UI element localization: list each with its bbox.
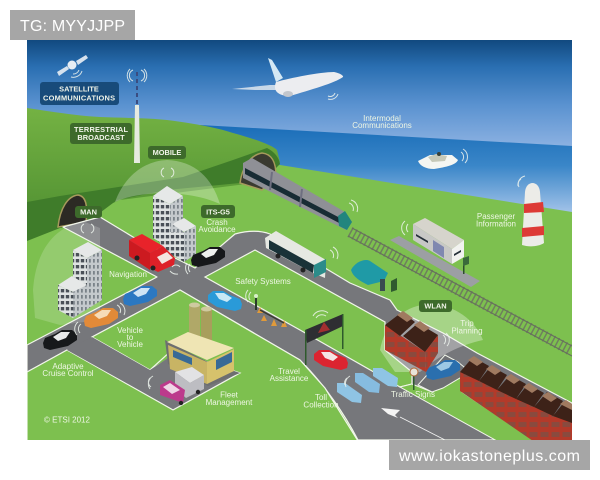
text: fleet management: Fleet [220,390,238,400]
railway [348,228,572,356]
hill [27,108,280,203]
green block: factory [27,290,358,441]
label: satellite communications [40,82,119,105]
road network [27,217,572,440]
label: its-g5: ITS-G5 [206,208,230,216]
toll gantry [305,311,344,365]
traffic sign [410,368,418,390]
label: wlan: WLAN [424,302,447,310]
label: its-g5 [201,205,235,218]
text: trip planning: Trip [460,319,474,328]
brick row houses [460,356,572,441]
text: intermodal communications: Communications [352,121,412,130]
watermark: top left [10,10,135,40]
icon: airplane [232,58,343,99]
label: terrestrial broadcast [70,123,132,144]
sky [27,40,572,148]
text: safety systems: Safety Systems [235,277,291,286]
bus shelter [351,260,397,292]
icon: terrestrial tower [127,69,147,163]
label: terrestrial broadcast: TERRESTRIAL [74,125,128,134]
red truck [129,234,175,272]
station [390,218,480,287]
bus [265,231,338,278]
orange car [84,308,118,328]
road dead end to fleet [67,337,169,407]
blue car navigation [123,286,157,306]
domes [33,160,483,372]
ground [27,165,572,440]
label: wlan [419,300,452,312]
illustration scene [27,40,572,441]
right tunnel [240,153,276,190]
wlan coverage dome [380,304,483,372]
text: trip planning: Planning [451,326,483,336]
black car crash avoidance [191,247,225,267]
text: vehicle to vehicle: to [127,333,134,342]
blue car safety [208,291,242,311]
green block: safety systems [205,250,412,387]
text: vehicle to vehicle: Vehicle [117,326,143,335]
mobile buildings [153,168,196,262]
text: toll collection: Collection [303,400,339,410]
train [243,158,358,230]
black car adaptive [43,330,77,350]
wlan brick building [385,311,449,372]
man coverage dome [33,222,100,325]
hill dark band [27,148,280,241]
text: etsi copyright: © ETSI 2012 [44,416,91,424]
blue car parked [426,360,460,380]
text: adaptive cruise control: Adaptive [52,362,84,371]
roads [27,217,572,441]
mobile coverage dome [115,160,220,204]
text: passenger information: Information [476,220,516,228]
road arrow [381,408,445,440]
icon: lighthouse [518,176,544,246]
label: man [75,206,102,218]
pink truck [160,367,204,405]
left tunnel [58,195,87,227]
watermark: top left: TG: MYYJJPP [20,18,125,35]
wave signals [75,263,251,389]
label: mobile [148,146,186,159]
toll lanes [337,368,398,403]
green verge by row houses [399,378,532,440]
text: passenger information: Passenger [477,212,515,221]
icon: ship [418,149,467,169]
label: man: MAN [80,208,97,216]
label: satellite communications: COMMUNICATIONS [43,94,115,102]
safety cones and lamp [254,294,287,327]
icon: satellite [57,55,88,77]
text: fleet management: Management [206,398,253,407]
label: satellite communications: SATELLITE [59,84,99,94]
sea [200,125,572,215]
text: travel assistance: Travel [278,367,300,376]
label: terrestrial broadcast: BROADCAST [77,133,125,142]
watermark: bottom right: www.iokastoneplus.com [398,448,580,465]
red car toll [314,350,348,370]
watermark: bottom right [389,440,590,470]
text: intermodal communications: Intermodal [363,114,401,123]
text: navigation: Navigation [109,270,147,279]
text: crash avoidance: Avoidance [198,225,236,234]
text: toll collection: Toll [315,393,327,402]
text: adaptive cruise control: Cruise Control [42,369,94,378]
parking lot [418,355,470,392]
text: crash avoidance: Crash [206,218,228,227]
text: travel assistance: Assistance [270,374,309,383]
text: vehicle to vehicle: Vehicle [117,340,143,349]
text: traffic signs: Traffic Signs [391,390,435,399]
factory [165,302,240,386]
man buildings [58,224,102,318]
label: mobile: MOBILE [153,148,181,157]
